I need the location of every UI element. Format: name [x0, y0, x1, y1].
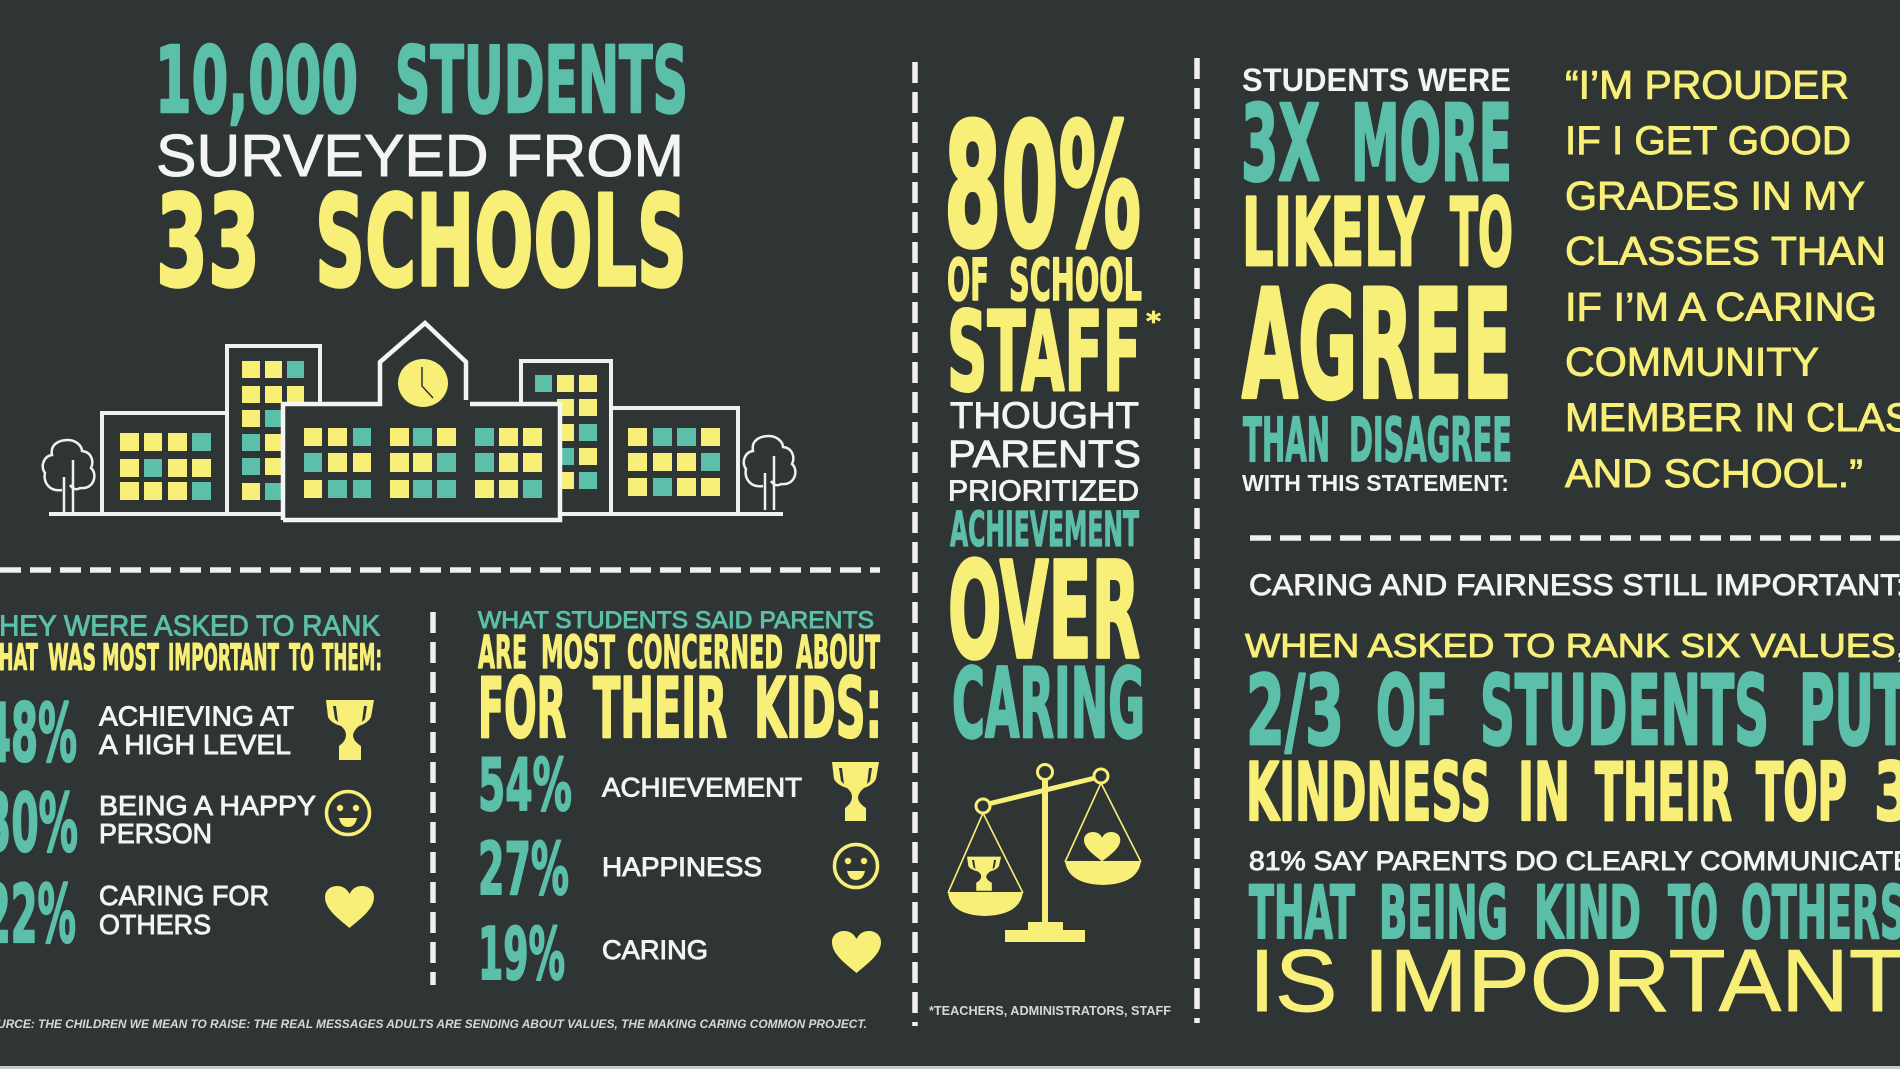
panel: caring and fairness: THAT: [1249, 871, 1355, 956]
panel: caring and fairness: BEING: [1379, 871, 1508, 956]
heading: parents' concerns: THEIR: [593, 660, 727, 757]
main building: [283, 323, 560, 520]
panel: 3x more likely: 3X: [1241, 83, 1320, 205]
title: SCHOOLS: [315, 168, 687, 315]
quote: IF I’M A CARING: [1565, 286, 1877, 330]
statement text: OVER: [948, 535, 1140, 689]
stat: 30% happy: BEING A HAPPY: [99, 790, 316, 821]
title: 10,000: [155, 27, 358, 134]
quote: GRADES IN MY: [1565, 174, 1865, 218]
panel: caring and fairness: IN: [1518, 746, 1570, 839]
quote: CLASSES THAN: [1565, 230, 1886, 274]
text: DISAGREE: [1349, 406, 1512, 476]
stat: 48% achieving: ACHIEVING AT: [99, 700, 294, 732]
panel: caring and fairness: THEIR: [1595, 746, 1732, 839]
statement text: STAFF: [947, 288, 1141, 416]
panel: caring and fairness: 2/3: [1246, 655, 1344, 767]
title: 33: [156, 168, 260, 315]
title: SURVEYED FROM: [156, 123, 684, 189]
stat: 19% caring: CARING: [602, 935, 708, 965]
illustration: school buildings: [43, 323, 795, 520]
heading: parents' concerns: FOR: [478, 660, 566, 757]
stat: 27% happiness: HAPPINESS: [602, 852, 762, 882]
stat: 30% happy: [0, 777, 370, 870]
stat: 48% achieving: [0, 687, 374, 780]
panel: caring and fairness: KIND: [1534, 871, 1641, 956]
heading: parents' concerns: [478, 607, 882, 757]
quote: COMMUNITY: [1565, 341, 1819, 385]
panel: 3x more likely: LIKELY: [1242, 179, 1424, 288]
heading: parents' concerns: WHAT STUDENTS SAID PARENTS: [478, 607, 874, 634]
panel: ranked by students: [0, 610, 382, 961]
panel: caring and fairness: [1245, 569, 1900, 1030]
panel: caring and fairness: KINDNESS: [1246, 746, 1491, 839]
stat: 27% happiness: [478, 828, 878, 912]
statement text: OF: [947, 246, 989, 314]
statement text: PRIORITIZED: [948, 476, 1139, 508]
heading: parents' concerns: CONCERNED: [627, 626, 783, 679]
panel: 80% of school staff: 80%: [944, 88, 1141, 286]
icon: right tree: [744, 436, 795, 510]
heading: asked to rank: [0, 610, 382, 679]
heading: parents' concerns: ARE: [478, 626, 527, 679]
heading: asked to rank: WAS: [48, 636, 96, 679]
stat: 48% achieving: A HIGH LEVEL: [99, 729, 291, 760]
stat: 54% achievement: ACHIEVEMENT: [602, 772, 802, 802]
panel: caring and fairness: IS IMPORTANT: [1249, 931, 1900, 1030]
statement text: ACHIEVEMENT: [950, 502, 1139, 558]
text: KIDS:: [754, 660, 882, 757]
text: ABOUT: [796, 626, 880, 679]
icon: left tree: [43, 440, 94, 514]
panel: 3x more likely: [1241, 62, 1513, 496]
quote: AND SCHOOL.”: [1565, 452, 1863, 496]
stat: 22% caring: OTHERS: [99, 909, 211, 940]
panel: 3x more likely: STUDENTS WERE: [1242, 62, 1511, 98]
panel: 3x more likely: WITH THIS STATEMENT:: [1242, 470, 1509, 496]
stat: 19% caring: 19%: [478, 913, 565, 997]
panel: caring and fairness: CARING AND FAIRNESS STILL IMPORTANT:: [1249, 569, 1900, 602]
statement text: SCHOOL: [1009, 246, 1142, 314]
panel: caring and fairness: WHEN ASKED TO RANK SIX VALUES,: [1245, 627, 1900, 664]
text: TO: [1450, 179, 1513, 288]
icon: balance scales: [948, 764, 1141, 942]
source note: SOURCE: THE CHILDREN WE MEAN TO RAISE: THE REAL MESSAGES ADULTS ARE SENDING ABOUT VALUES, THE MAKING CARING COMMON PROJECT.: [0, 1019, 867, 1031]
stat: 54% achievement: [478, 744, 879, 828]
stat: 22% caring: [0, 868, 374, 961]
text: MORE: [1351, 83, 1512, 205]
statement text: [947, 246, 1161, 760]
panel: parents' concerns: [478, 607, 882, 997]
stat: 54% achievement: 54%: [478, 744, 572, 828]
panel: 3x more likely: THAN: [1243, 406, 1330, 476]
quote: “I’M PROUDER: [1565, 64, 1849, 108]
stat: 22% caring: CARING FOR: [99, 880, 269, 911]
heading: asked to rank: IMPORTANT: [168, 636, 279, 679]
text: AGREE: [1242, 259, 1512, 433]
panel: caring and fairness: 81% SAY PARENTS DO CLEARLY COMMUNICATE: [1249, 846, 1900, 876]
statement text: THOUGHT: [950, 395, 1139, 436]
statement text: *: [1146, 307, 1161, 337]
quote: [1565, 64, 1900, 496]
heading: asked to rank: MOST: [102, 636, 159, 679]
title: STUDENTS: [395, 27, 688, 134]
panel: caring and fairness: OF: [1376, 655, 1448, 767]
panel: 80% of school staff: [929, 88, 1171, 1018]
heading: parents' concerns: MOST: [541, 626, 615, 679]
text: THEM:: [322, 636, 382, 679]
title: [155, 27, 688, 315]
stat: 27% happiness: 27%: [478, 828, 569, 912]
stat: 30% happy: PERSON: [99, 818, 212, 849]
quote: IF I GET GOOD: [1565, 119, 1851, 163]
heading: asked to rank: TO: [289, 636, 314, 679]
statement text: PARENTS: [948, 434, 1141, 476]
stat: 19% caring: [478, 913, 881, 997]
panel: caring and fairness: TO: [1668, 871, 1718, 956]
footnote: *TEACHERS, ADMINISTRATORS, STAFF: [929, 1004, 1171, 1018]
statement text: CARING: [952, 648, 1145, 760]
